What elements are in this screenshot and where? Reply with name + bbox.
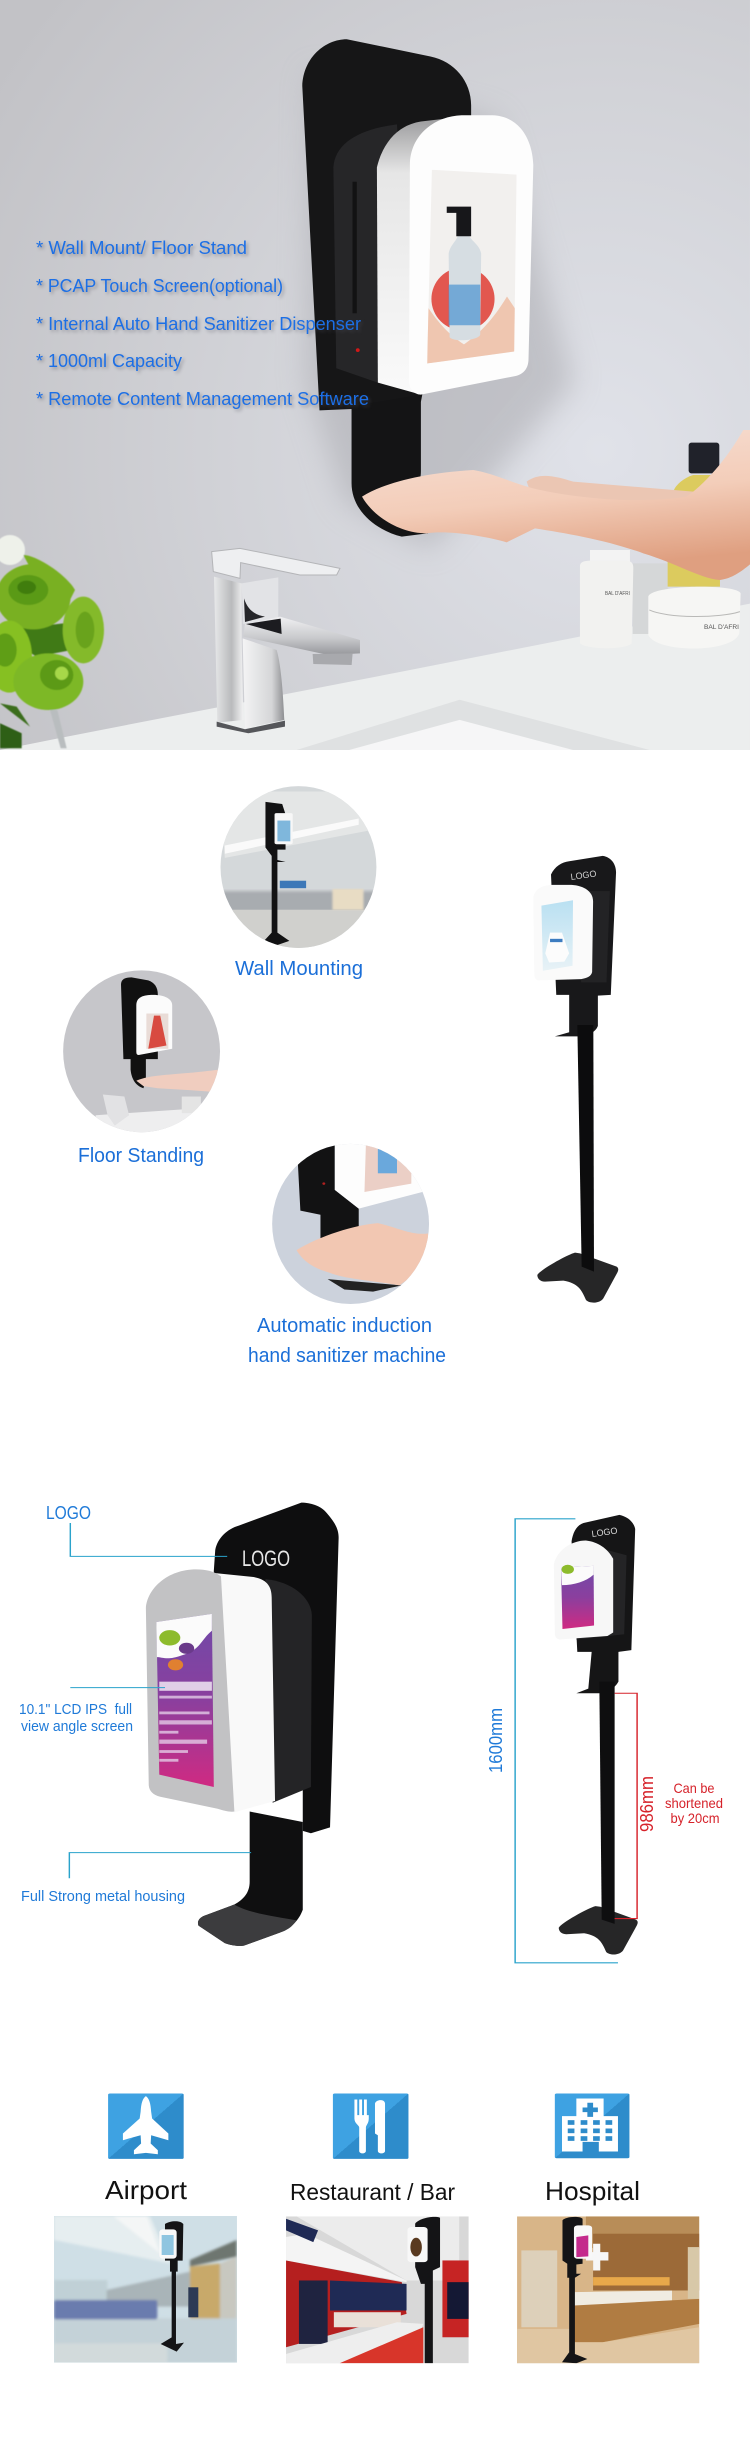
panel: hero bathroom scene <box>0 0 750 750</box>
silver side <box>376 118 444 395</box>
note: shortened: shortened <box>665 1795 723 1811</box>
pump <box>447 207 471 236</box>
callout: logo: LOGO <box>46 1503 91 1523</box>
callout: screen: view angle screen <box>21 1719 133 1735</box>
middle bottle <box>633 563 668 634</box>
red circle <box>431 267 495 331</box>
icon: fork and knife <box>333 2093 408 2159</box>
callout: screen <box>19 1702 133 1735</box>
silver face <box>146 1569 234 1812</box>
wall and dispenser <box>0 0 750 750</box>
base <box>559 1906 638 1955</box>
hero photo illustration <box>0 0 750 750</box>
jar <box>648 587 741 649</box>
label: restaurant: Restaurant / Bar <box>290 2179 455 2205</box>
caption: automatic induction: hand sanitizer machine <box>248 1345 446 1367</box>
plant and faucet <box>0 535 360 748</box>
icon: airplane <box>108 2093 184 2159</box>
white bottle: BAL D'AFRI <box>605 591 630 597</box>
photo: restaurant <box>286 2216 469 2363</box>
white bottle <box>580 550 634 636</box>
sensor slit <box>353 182 357 313</box>
large product view <box>69 1503 638 1963</box>
label: airport: Airport <box>105 2175 188 2205</box>
circle: floor standing scene <box>62 970 222 1134</box>
back plate <box>302 39 471 410</box>
panel: application scenes <box>54 2093 699 2363</box>
panel: product details and dimensions <box>19 1503 723 1963</box>
sink <box>297 700 650 750</box>
dimension: height: 1600mm <box>486 1708 506 1773</box>
panel: usage modes <box>62 785 618 1367</box>
amber bottle <box>667 443 720 587</box>
plant <box>0 535 104 748</box>
label: small LOGO: LOGO <box>591 1525 618 1539</box>
faucet <box>212 548 360 733</box>
screen <box>427 170 516 364</box>
dimension lines <box>515 1519 618 1963</box>
floor stand product <box>533 856 616 1036</box>
housing <box>334 124 398 382</box>
circle: automatic induction scene <box>272 1143 430 1305</box>
screen lines <box>159 1682 212 1762</box>
feature list <box>36 238 369 409</box>
label: stand logo: LOGO <box>570 868 597 882</box>
red light <box>356 348 360 352</box>
caption: wall mounting: Wall Mounting <box>235 958 363 980</box>
feature list: * PCAP Touch Screen(optional) <box>36 276 283 296</box>
callout: screen: 10.1" LCD IPS full <box>19 1702 132 1718</box>
photo: hospital <box>517 2216 699 2363</box>
wall <box>0 0 750 750</box>
back plate <box>214 1503 339 1833</box>
white front <box>409 115 533 395</box>
leader lines <box>69 1523 251 1878</box>
photo: airport <box>54 2216 237 2363</box>
spout <box>352 395 428 537</box>
toiletries and arm <box>362 430 750 649</box>
bottle <box>449 234 481 340</box>
feature list: * Internal Auto Hand Sanitizer Dispenser <box>36 314 361 334</box>
caption: floor standing: Floor Standing <box>78 1145 204 1167</box>
spout <box>198 1812 303 1946</box>
icon: hospital <box>555 2093 629 2158</box>
stand base and pole <box>537 1025 618 1303</box>
small stand <box>554 1515 638 1955</box>
caption: automatic induction: Automatic induction <box>257 1315 432 1337</box>
hands <box>427 297 517 364</box>
feature list: * Remote Content Management Software <box>36 389 369 409</box>
white side band <box>213 1573 275 1812</box>
feature list: * Wall Mount/ Floor Stand <box>36 238 247 258</box>
feature list: * 1000ml Capacity <box>36 351 182 371</box>
far arm <box>526 476 693 500</box>
housing <box>265 1579 312 1803</box>
dimension: pole: 986mm <box>637 1776 657 1832</box>
note: shortened: by 20cm <box>670 1810 720 1826</box>
tray <box>198 1905 297 1946</box>
mode illustrations <box>62 785 616 1305</box>
arm and hand <box>362 430 750 580</box>
dispenser shadow <box>306 72 574 550</box>
callout: housing: Full Strong metal housing <box>21 1889 185 1905</box>
circle: wall mounting scene <box>220 785 378 949</box>
caption: automatic induction <box>248 1315 446 1367</box>
shorten dimension line <box>615 1693 637 1919</box>
counter <box>0 604 750 750</box>
label <box>449 285 480 325</box>
scene artwork <box>108 2093 699 2363</box>
note: shortened: Can be <box>674 1780 715 1796</box>
screen <box>156 1614 214 1787</box>
jar: BAL D'AFRI <box>704 624 739 631</box>
label: LOGO on plate: LOGO <box>242 1546 290 1571</box>
label: hospital: Hospital <box>545 2176 640 2206</box>
note: shortened <box>665 1780 723 1826</box>
